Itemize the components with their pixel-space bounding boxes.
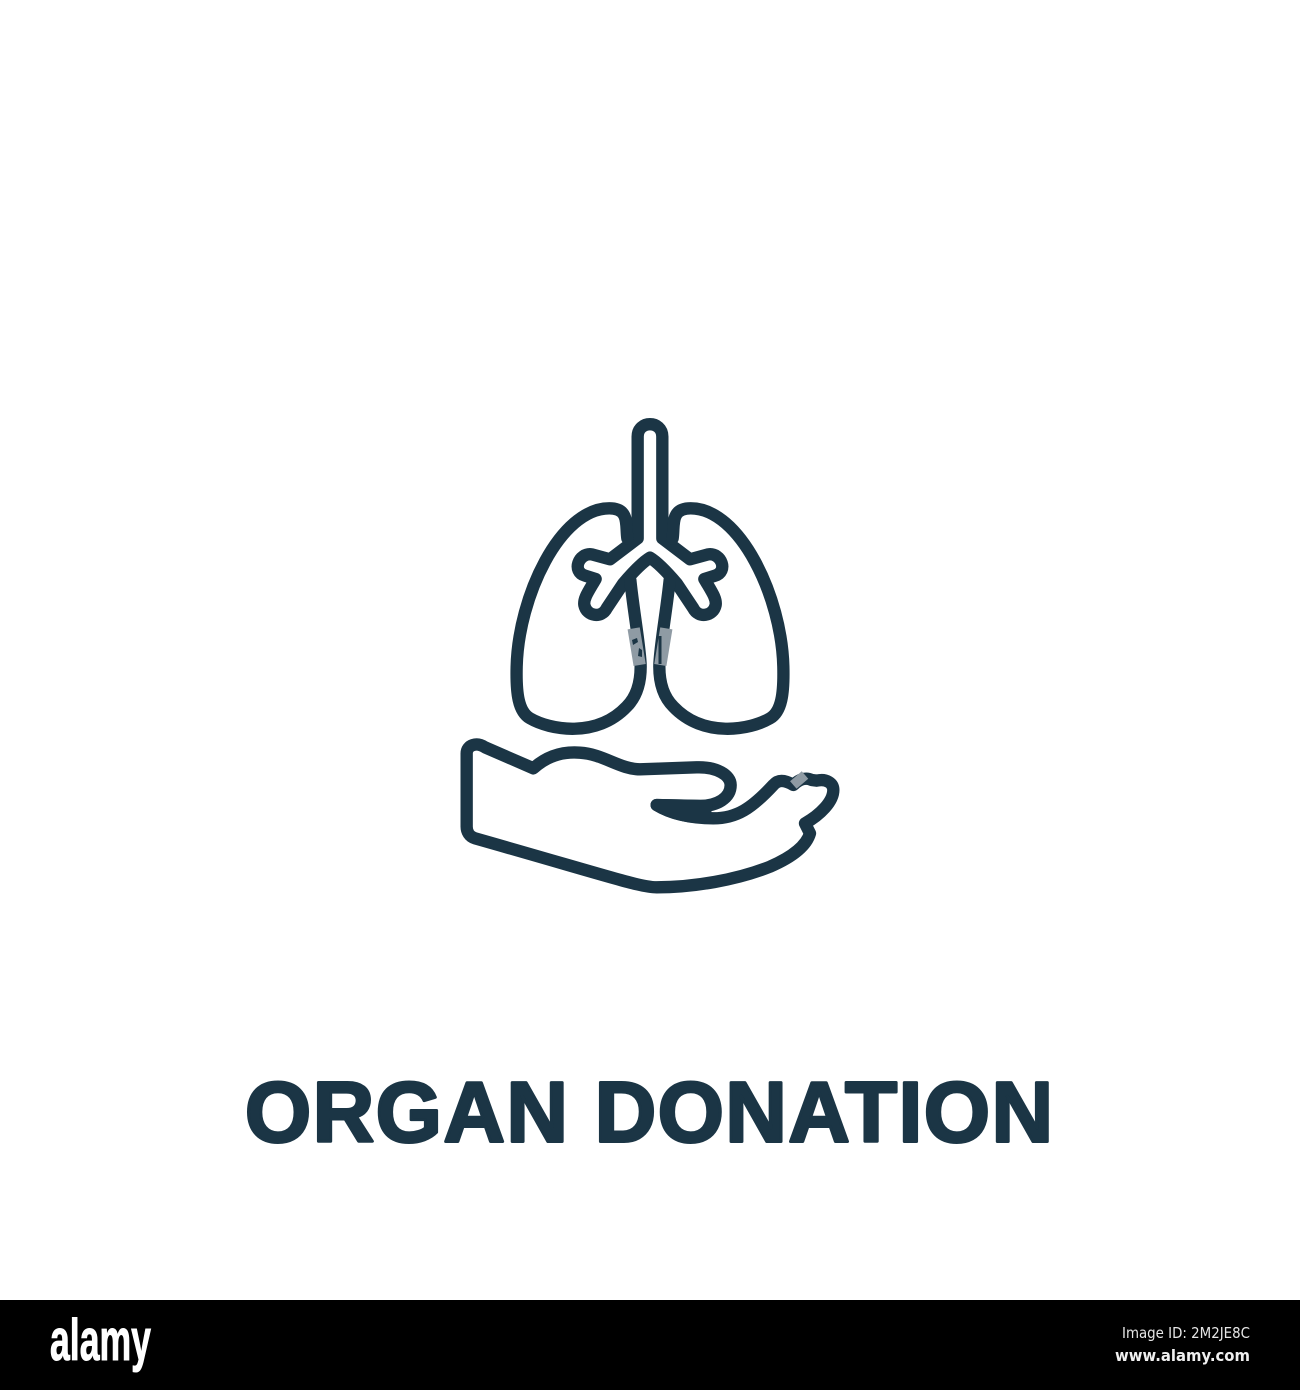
footer bar <box>0 1300 1300 1390</box>
website: www.alamy.com <box>1115 1346 1250 1365</box>
left lung <box>517 508 641 729</box>
title: ORGAN DONATION <box>245 1066 1053 1160</box>
watermark detail on lung stems <box>632 636 662 664</box>
thumb wedge <box>657 805 707 817</box>
trachea and bronchi <box>578 424 722 615</box>
watermark patch on fingertip <box>793 775 805 785</box>
right lung <box>659 508 783 729</box>
watermark patch on lung stems <box>634 628 666 665</box>
icon: open hand <box>467 745 833 887</box>
alamy logo: alamy <box>50 1308 151 1373</box>
icon: lungs <box>517 424 783 729</box>
image id: Image ID: 2M2JE8C <box>1122 1324 1250 1342</box>
hand outline <box>467 745 833 887</box>
